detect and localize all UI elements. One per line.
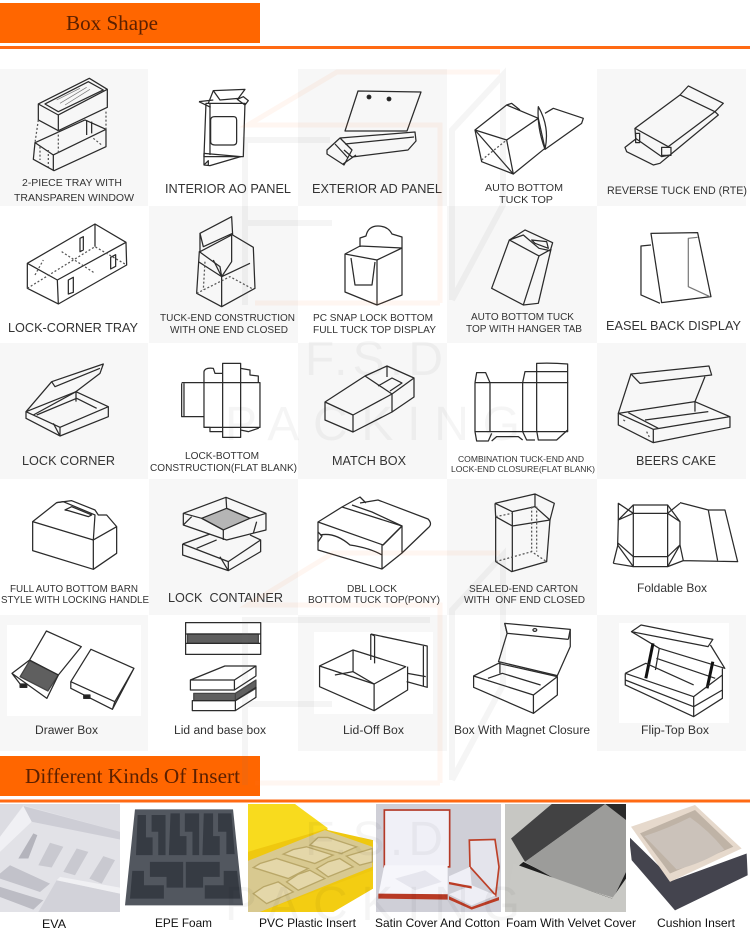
heading: Box Shape: [0, 3, 750, 49]
icon: magnet closure box: [474, 623, 570, 713]
label: [308, 583, 440, 606]
label: COMBINATION TUCK-END AND: [458, 454, 584, 464]
label: [466, 311, 582, 335]
icon: lock-corner tray: [27, 224, 127, 304]
insert: foam with velvet cover: [505, 804, 636, 930]
label: TOP WITH HANGER TAB: [466, 323, 582, 335]
cell: exterior AD panel: [298, 69, 447, 206]
cell: lock container: [149, 479, 298, 615]
label: Box With Magnet Closure: [454, 725, 590, 737]
label: BEERS CAKE: [636, 453, 716, 468]
label: [1, 583, 149, 606]
label: Foam With Velvet Cover: [506, 916, 636, 930]
cell: lock-corner tray: [8, 224, 138, 335]
label: WITH ONF END CLOSED: [464, 594, 585, 606]
label: Lid-Off Box: [343, 725, 404, 737]
label: EVA: [42, 917, 66, 931]
cell: auto bottom with hanger tab: [447, 206, 597, 343]
watermark: FSD Packing logo: F.S.D: [305, 813, 443, 866]
cell: lid and base box: [174, 623, 266, 737]
cell: beers cake: [597, 343, 746, 479]
cell: full auto bottom barn: [1, 501, 149, 606]
label: DBL LOCK: [347, 583, 397, 595]
label: TUCK-END CONSTRUCTION: [160, 312, 295, 324]
photo: cushion insert: [630, 805, 748, 910]
label: PVC Plastic Insert: [259, 916, 357, 930]
label: EASEL BACK DISPLAY: [606, 318, 741, 333]
cell: lid-off box: [298, 615, 447, 751]
icon: combination flat blank: [475, 363, 568, 441]
insert: EPE foam: [125, 804, 243, 930]
cell: tuck-end construction: [149, 206, 298, 343]
label: [485, 182, 563, 206]
cell: 2-piece tray: [0, 69, 148, 206]
label: [150, 451, 297, 474]
label: LOCK-BOTTOM: [185, 451, 259, 462]
label: LOCK CONTAINER: [168, 590, 283, 605]
label: Flip-Top Box: [641, 725, 709, 737]
cell: drawer box: [0, 615, 148, 751]
icon: beers cake box: [618, 366, 730, 443]
insert: PVC plastic: [248, 804, 373, 930]
insert: cushion: [629, 804, 750, 930]
icon: DBL lock bottom box: [318, 497, 430, 569]
panel: insert types: [0, 804, 750, 931]
label: LOCK-END CLOSURE(FLAT BLANK): [451, 464, 595, 474]
watermark: FSD Packing logo: [225, 72, 520, 931]
icon: hanger tab box: [492, 230, 553, 305]
cell: easel back display: [606, 233, 741, 333]
label: Satin Cover And Cotton: [375, 916, 500, 930]
label: [464, 583, 585, 606]
cell: DBL lock: [308, 497, 440, 606]
icon: reverse tuck end box: [625, 86, 723, 165]
insert: EVA: [0, 804, 120, 931]
label: FULL AUTO BOTTOM BARN: [10, 583, 138, 595]
label: AUTO BOTTOM TUCK: [471, 311, 574, 323]
label: LOCK-CORNER TRAY: [8, 320, 138, 335]
cell: PC snap lock: [313, 226, 436, 336]
label: PC SNAP LOCK BOTTOM: [313, 312, 433, 324]
icon: lid and base box: [186, 623, 261, 711]
icon: lock-bottom flat blank: [182, 363, 260, 437]
heading: Different Kinds Of Insert: [0, 756, 750, 802]
cell: box with magnet closure: [454, 623, 590, 737]
icon: barn style box: [33, 501, 117, 569]
icon: flip-top box: [625, 625, 725, 717]
icon: lid-off box: [320, 634, 427, 711]
label: Cushion Insert: [657, 916, 736, 930]
icon: easel display: [641, 233, 711, 303]
icon: lock corner box: [26, 364, 108, 436]
label: Lid and base box: [174, 725, 266, 737]
icon: match box: [325, 366, 414, 432]
label: TRANSPAREN WINDOW: [14, 192, 134, 204]
icon: snap lock display: [345, 226, 402, 305]
label: [14, 177, 134, 204]
photo: satin insert: [376, 804, 501, 912]
icon: foldable box: [613, 503, 738, 567]
label: WITH ONE END CLOSED: [170, 324, 288, 336]
cell: flip-top box: [597, 615, 746, 751]
photo: EVA insert: [0, 804, 120, 912]
photo: foam with velvet cover: [505, 804, 626, 912]
label: Foldable Box: [637, 581, 707, 595]
cell: match box: [298, 343, 447, 479]
icon: interior panel box: [199, 89, 248, 166]
icon: lock container: [183, 497, 266, 571]
cell: lock corner: [0, 343, 148, 479]
label: [160, 312, 295, 336]
label: SEALED-END CARTON: [469, 583, 578, 595]
insert: satin cover and cotton: [375, 804, 501, 930]
icon: drawer box: [12, 631, 134, 709]
cell: sealed-end carton: [447, 479, 597, 615]
watermark: FSD Packing logo: PACKING: [225, 398, 520, 451]
icon: sealed-end carton: [495, 494, 554, 572]
label: TUCK TOP: [499, 194, 553, 206]
photo: EPE foam insert: [125, 809, 243, 906]
icon: exterior panel box: [327, 91, 421, 165]
label: CONSTRUCTION(FLAT BLANK): [150, 463, 297, 474]
icon: 2-piece tray with window: [33, 78, 107, 171]
panel: box shape grid: [0, 69, 747, 751]
label: Drawer Box: [35, 725, 98, 737]
cell: auto bottom tuck top: [475, 103, 583, 206]
label: REVERSE TUCK END (RTE): [607, 185, 747, 197]
label: FULL TUCK TOP DISPLAY: [313, 324, 436, 336]
cell: combination tuck-end: [451, 363, 595, 474]
label: INTERIOR AO PANEL: [165, 181, 291, 196]
heading: Different Kinds Of Insert: Different Kinds Of Insert: [25, 764, 240, 788]
watermark: FSD Packing logo: F.S.D: [305, 333, 443, 386]
cell: interior AO panel: [165, 89, 291, 196]
label: MATCH BOX: [332, 453, 406, 468]
cell: foldable box: [613, 503, 738, 595]
label: LOCK CORNER: [22, 453, 115, 468]
label: [451, 454, 595, 474]
label: BOTTOM TUCK TOP(PONY): [308, 594, 440, 606]
photo: PVC plastic insert: [248, 804, 373, 912]
cell: lock-bottom construction: [150, 363, 297, 474]
label: 2-PIECE TRAY WITH: [22, 177, 122, 189]
watermark: FSD Packing logo: PACKING: [225, 878, 520, 931]
icon: auto bottom box: [475, 103, 583, 174]
label: [313, 312, 436, 336]
label: STYLE WITH LOCKING HANDLE: [1, 594, 149, 606]
label: EXTERIOR AD PANEL: [312, 181, 442, 196]
icon: tuck-end carton: [197, 217, 255, 307]
label: EPE Foam: [155, 916, 212, 930]
cell: reverse tuck end: [597, 69, 747, 206]
heading: Box Shape: Box Shape: [66, 11, 158, 35]
label: AUTO BOTTOM: [485, 182, 563, 194]
